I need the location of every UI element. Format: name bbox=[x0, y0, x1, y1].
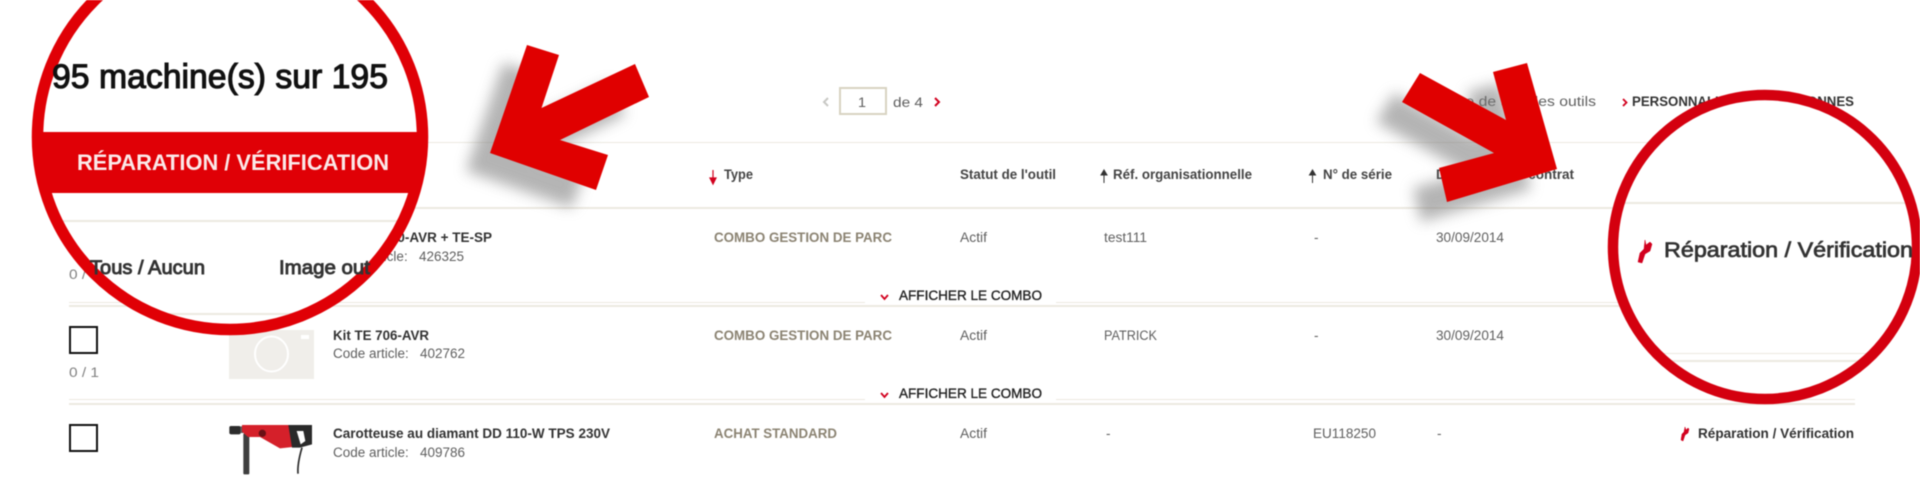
left magnifier callout bbox=[30, 0, 430, 330]
row 3: ACHAT STANDARD bbox=[714, 426, 837, 441]
row 1 bbox=[69, 230, 1504, 282]
image placeholder bbox=[229, 330, 314, 379]
row 3: Réparation / Vérification bbox=[1698, 426, 1854, 441]
band: repair button bbox=[30, 132, 430, 315]
icon: drill bbox=[229, 425, 312, 474]
checkbox row 3 bbox=[70, 425, 97, 451]
row 2: - bbox=[1314, 328, 1318, 343]
image column label: Image out bbox=[279, 257, 371, 279]
select all label: Tous / Aucun bbox=[90, 257, 205, 279]
row 1: COMBO GESTION DE PARC bbox=[714, 230, 892, 245]
pagination: de 4 bbox=[893, 95, 924, 110]
row 2: Code article: 402762 bbox=[333, 346, 465, 361]
show combo link 2: AFFICHER LE COMBO bbox=[899, 385, 1042, 401]
row 2: 30/09/2014 bbox=[1436, 328, 1504, 343]
row 3: - bbox=[1437, 426, 1442, 441]
row 3: Actif bbox=[960, 426, 987, 441]
row 1: Actif bbox=[960, 230, 987, 245]
icon: wrench large bbox=[1638, 240, 1652, 263]
table header bbox=[710, 167, 1574, 184]
table header: Type bbox=[724, 167, 753, 182]
row 1: 30/09/2014 bbox=[1436, 230, 1504, 245]
row 1: 0 / 1 bbox=[69, 267, 99, 282]
table rules bbox=[69, 142, 1855, 405]
row 1: test111 bbox=[1104, 230, 1147, 245]
magnified count heading: 95 machine(s) sur 195 bbox=[52, 58, 388, 96]
magnified rules bbox=[1624, 202, 1906, 362]
row 3: Carotteuse au diamant DD 110-W TPS 230V bbox=[333, 426, 610, 441]
toolbar links: Liste de tous les outils bbox=[1441, 94, 1596, 109]
row 2 bbox=[69, 327, 1504, 380]
toolbar links: PERSONNALISER LES COLONNES bbox=[1632, 94, 1854, 109]
pagination: 1 bbox=[858, 95, 866, 110]
button label: RÉPARATION / VÉRIFICATION bbox=[77, 150, 389, 175]
table header: N° de série bbox=[1323, 167, 1392, 182]
pagination bbox=[824, 88, 939, 114]
row 2: PATRICK bbox=[1104, 328, 1157, 343]
show combo link 1: AFFICHER LE COMBO bbox=[899, 287, 1042, 303]
left arrow bbox=[466, 45, 649, 208]
row 2: COMBO GESTION DE PARC bbox=[714, 328, 892, 343]
right magnifier callout bbox=[1600, 95, 1920, 399]
checkbox row 2 bbox=[70, 327, 97, 353]
right arrow bbox=[1376, 63, 1557, 222]
toolbar links bbox=[1441, 94, 1854, 109]
row 1: Code article: 426325 bbox=[332, 249, 464, 264]
magnified repair label: Réparation / Vérification bbox=[1664, 239, 1913, 262]
row 3: - bbox=[1106, 426, 1110, 441]
row 3: Code article: 409786 bbox=[333, 445, 465, 460]
row 3 bbox=[70, 425, 1854, 474]
ring bbox=[38, 0, 422, 330]
row 2: Actif bbox=[960, 328, 987, 343]
row 3: EU118250 bbox=[1313, 426, 1376, 441]
row 1: - bbox=[1314, 230, 1318, 245]
table header: Date de fin de contrat bbox=[1436, 167, 1574, 182]
row 2: 0 / 1 bbox=[69, 365, 99, 380]
row 2: Kit TE 706-AVR bbox=[333, 328, 429, 343]
icon: wrench small bbox=[1681, 427, 1689, 441]
row 1: Kit TE 500-AVR + TE-SP bbox=[340, 230, 492, 245]
table header: Réf. organisationnelle bbox=[1113, 167, 1252, 182]
table header: Statut de l'outil bbox=[960, 167, 1056, 182]
ring bbox=[1613, 95, 1917, 399]
